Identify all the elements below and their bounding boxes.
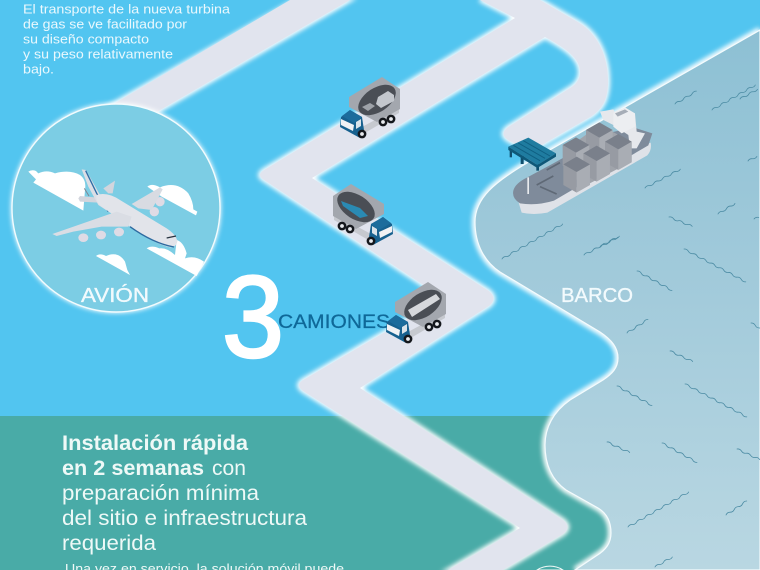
- intro text block: su diseño compacto: [23, 32, 149, 46]
- heading and body text: rapid installation: requerida: [62, 531, 156, 555]
- icon: pier: [508, 138, 556, 171]
- road: airport branch: [110, 0, 350, 116]
- label: BARCO: BARCO: [561, 285, 633, 307]
- sea area: [475, 30, 760, 570]
- heading and body text: rapid installation: en 2 semanas: [62, 456, 204, 480]
- small circle edge at the bottom: [537, 566, 563, 570]
- background: sky blue field: [0, 0, 760, 416]
- heading and body text: rapid installation: con: [212, 456, 246, 480]
- label: CAMIONES: CAMIONES: [278, 312, 390, 333]
- heading and body text: rapid installation: Instalación rápida: [62, 431, 249, 455]
- icon: cargo ship: [513, 107, 652, 214]
- heading and body text: rapid installation: [62, 431, 344, 570]
- intro text block: [23, 2, 231, 76]
- big number 3: 3: [222, 252, 284, 382]
- truck 1: [340, 77, 401, 138]
- sea waves: [502, 84, 760, 568]
- truck 3: [386, 282, 447, 343]
- truck 2: [332, 184, 393, 245]
- road: winding truck route to the pier: [260, 0, 608, 570]
- intro text block: y su peso relativamente: [23, 46, 173, 62]
- icon: clouds and airplane: [28, 169, 204, 276]
- panel: airplane circle: [11, 103, 221, 313]
- heading and body text: rapid installation: preparación mínima: [62, 481, 259, 505]
- intro text block: El transporte de la nueva turbina: [23, 2, 231, 16]
- heading and body text: rapid installation: del sitio e infraestructura: [62, 506, 307, 530]
- background: teal band: [0, 416, 760, 570]
- label: AVIÓN: AVIÓN: [81, 284, 149, 307]
- intro text block: bajo.: [23, 62, 54, 76]
- intro text block: de gas se ve facilitado por: [23, 16, 188, 32]
